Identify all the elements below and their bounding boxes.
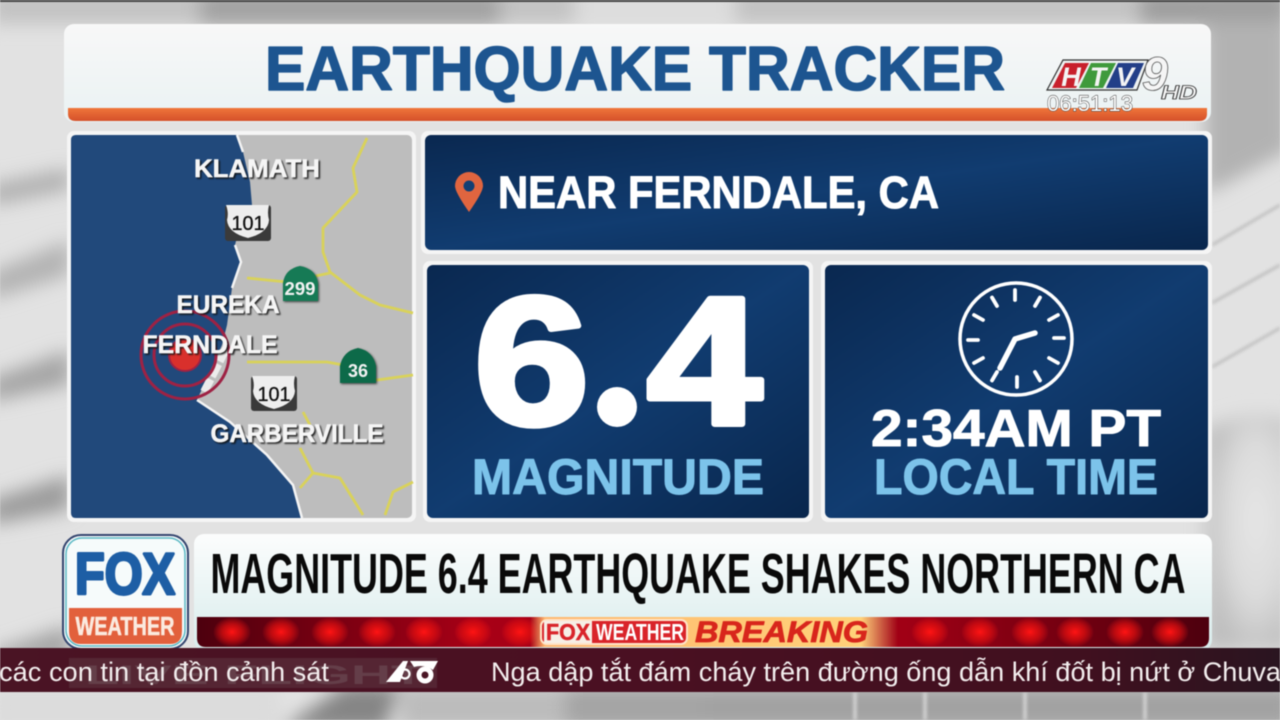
logo: Fox Weather [63, 535, 188, 649]
coastline [197, 135, 302, 518]
label: Eureka: EUREKA [176, 291, 280, 319]
magnitude decimal point [597, 387, 637, 427]
logo: HTV9 HD [1047, 47, 1197, 104]
faded underlying graphic [69, 658, 437, 690]
logo: Fox Weather: WEATHER [76, 611, 175, 641]
logo: HTV9 HD: 9 [1142, 47, 1168, 100]
logo: Fox Weather: FOX [75, 542, 175, 607]
magnitude label: MAGNITUDE [472, 449, 764, 505]
logo: HTV9 HD: V [1116, 62, 1136, 92]
panel: local time [821, 261, 1212, 522]
breaking strip [197, 616, 1209, 649]
logo: HTV9 HD: HD [1161, 83, 1197, 104]
headline banner [194, 534, 1212, 650]
icon: US 101 north shield: 101 [232, 213, 264, 235]
icon: channel 60 logo [386, 661, 438, 684]
icon: CA 36 shield: 36 [348, 361, 368, 381]
ocean [71, 135, 302, 518]
icon: CA 299 shield: 299 [284, 279, 316, 299]
label: Ferndale: FERNDALE [142, 331, 278, 359]
icon: CA 299 shield [283, 266, 318, 301]
label: Garberville: GARBERVILLE [210, 420, 384, 448]
time label: LOCAL TIME [874, 449, 1158, 505]
orange accent bar [68, 108, 1207, 121]
title: EARTHQUAKE TRACKER [265, 35, 1005, 104]
magnitude value: 6.4 [474, 259, 762, 463]
title banner [64, 24, 1211, 122]
breaking logo: FOX [546, 619, 591, 645]
logo: HTV9 HD: H [1061, 62, 1081, 92]
icon: US 101 north shield [225, 205, 271, 241]
icon: US 101 south shield [251, 376, 297, 411]
breaking logo: WEATHER [596, 619, 684, 645]
faded underlying graphic: LIVE FLIGHT [85, 660, 426, 690]
panel: magnitude [423, 259, 813, 522]
epicentre rings [141, 311, 229, 399]
roads [247, 138, 413, 515]
ticker bar [0, 648, 1280, 692]
logo: HTV9 HD: T [1090, 62, 1109, 92]
icon: clock [960, 283, 1072, 395]
icon: CA 36 shield [340, 348, 376, 383]
breaking logo [541, 619, 687, 645]
label: Klamath: KLAMATH [194, 155, 320, 183]
breaking word: BREAKING [695, 616, 868, 649]
location text: NEAR FERNDALE, CA [498, 167, 939, 218]
icon: location pin [455, 172, 483, 212]
panel: location [421, 131, 1212, 254]
ticker text right: Nga dập tắt đám cháy trên đường ống dẫn khí đốt bị nứt ở Chuva [491, 656, 1280, 687]
ticker text left: các con tin tại đồn cảnh sát [0, 657, 329, 687]
icon: US 101 south shield: 101 [258, 384, 290, 406]
breaking highlight [530, 617, 898, 647]
broadcast clock: 06:51:13 [1047, 91, 1133, 116]
time value: 2:34AM PT [871, 400, 1161, 458]
panel: map [67, 131, 416, 522]
